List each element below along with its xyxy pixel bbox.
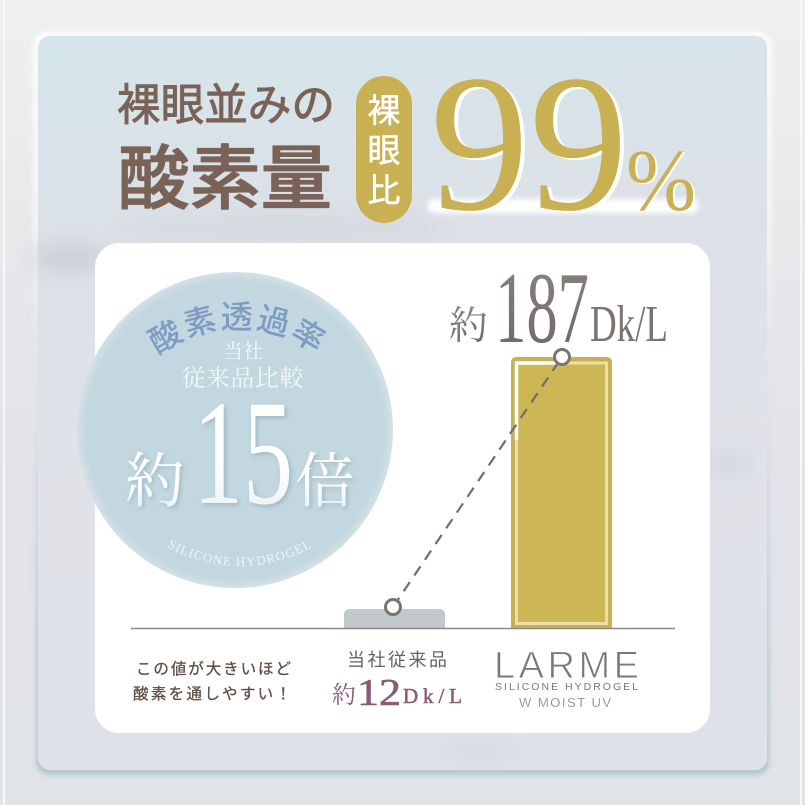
logo: LARME: W MOIST UV xyxy=(519,695,611,710)
value: 約15倍: 約 xyxy=(125,449,185,515)
badge: 裸眼比: 裸 xyxy=(368,92,400,129)
trend line: dashed connector xyxy=(386,350,570,614)
baseline xyxy=(131,628,675,630)
note: この値が大きいほど: この値が大きいほど xyxy=(136,660,291,678)
label: 約187Dk/L xyxy=(449,252,668,365)
bar: LARME xyxy=(511,357,612,628)
label: 当社従来品 約12Dk/L: Dk/L xyxy=(403,684,462,708)
stat: 99%: % xyxy=(628,134,698,231)
title: 裸眼並みの酸素量: 裸眼並みの xyxy=(117,81,335,130)
logo: LARME xyxy=(494,645,639,710)
curved label: SILICONE HYDROGEL: SILICONE HYDROGEL xyxy=(168,540,312,566)
subheading: 当社従来品比較: 従来品比較 xyxy=(182,365,304,392)
subheading: 当社従来品比較: 当社 xyxy=(223,340,263,363)
label: 当社従来品 約12Dk/L: 当社従来品 xyxy=(347,650,447,670)
title: 裸眼並みの酸素量 xyxy=(117,81,335,218)
bar: conventional product xyxy=(344,609,445,628)
label: 当社従来品 約12Dk/L: 約 xyxy=(332,682,356,709)
circle callout: 約15倍 xyxy=(77,272,393,588)
label: 当社従来品 約12Dk/L xyxy=(332,650,462,714)
curved heading: 酸素透過率: 酸素透過率 xyxy=(146,301,326,356)
label: 約187Dk/L: Dk/L xyxy=(590,296,668,353)
note: この値が大きいほど xyxy=(133,660,291,703)
logo: LARME: LARME xyxy=(494,645,639,687)
value: 約15倍: 15 xyxy=(193,370,293,536)
subheading: 当社従来品比較 xyxy=(182,340,304,392)
white chart panel xyxy=(95,243,710,733)
label: 約187Dk/L: 187 xyxy=(495,252,589,365)
value: 約15倍 xyxy=(125,370,355,536)
note: この値が大きいほど: 酸素を通しやすい！ xyxy=(133,685,291,703)
badge: 裸眼比: 比 xyxy=(368,172,400,209)
value: 約15倍: 倍 xyxy=(295,449,355,515)
title: 裸眼並みの酸素量: 酸素量 xyxy=(118,140,332,218)
stat: 99%: % xyxy=(626,133,696,230)
label: 約187Dk/L: 約 xyxy=(449,305,488,348)
stat: 99%: 99 xyxy=(430,35,628,252)
logo: LARME: SILICONE HYDROGEL xyxy=(495,681,638,693)
badge: 裸眼比 xyxy=(356,76,412,223)
badge: 裸眼比: 眼 xyxy=(368,132,400,169)
stat: 99%: 99 xyxy=(434,37,632,254)
label: 当社従来品 約12Dk/L: 12 xyxy=(357,672,401,714)
